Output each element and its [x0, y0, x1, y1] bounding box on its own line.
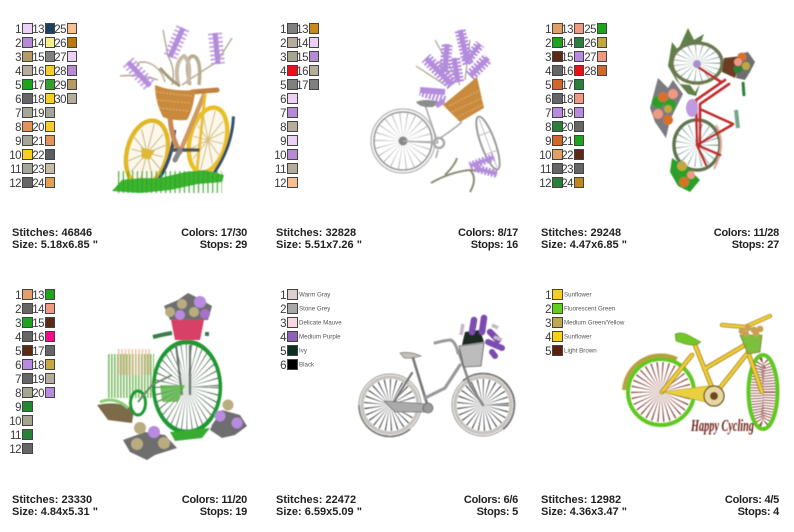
colour legend 2: 5: [280, 80, 286, 92]
lavender stems: [120, 30, 232, 86]
colour legend 1: 29: [54, 80, 66, 92]
colour legend 4: 20: [32, 388, 44, 400]
stitch and size stats 4: Colors: 11/20: [182, 494, 247, 506]
stitch and size stats 1: Colors: 17/30: [181, 227, 247, 239]
frame: [403, 105, 462, 158]
colour legend 4: 19: [32, 374, 44, 386]
bottom flower cluster: [670, 158, 700, 192]
illustration: yellow bicycle with lavender basket on grass: [112, 28, 236, 193]
colour legend 5: Delicate Mauve: [299, 320, 342, 326]
chain guard: [662, 386, 710, 403]
colour legend 1: 8: [15, 122, 21, 134]
stitch and size stats 6: Stops: 4: [738, 506, 780, 518]
panel: design 4 penny farthing with flowers: [9, 290, 247, 518]
colour legend 1: 14: [32, 38, 45, 50]
rear wheel: [371, 109, 435, 173]
rear wheel: [359, 374, 421, 436]
colour legend 3: 13: [561, 24, 573, 36]
colour legend 3: 6: [545, 94, 551, 106]
colour legend 1: 20: [32, 122, 44, 134]
bottom wheel: [674, 120, 721, 170]
colour legend 4: 16: [32, 332, 44, 344]
colour legend 6: 1: [545, 290, 551, 302]
top wheel: [672, 43, 722, 83]
colour legend 5: Ivy: [299, 348, 308, 354]
colour legend 3: 10: [539, 150, 551, 162]
colour legend 4: 11: [10, 430, 21, 442]
lavender flowers: [128, 28, 218, 86]
colour legend 6: 4: [545, 332, 552, 344]
basket: [459, 343, 484, 367]
colour legend 3: 25: [584, 24, 596, 36]
stitch and size stats 3: Stitches: 29248: [541, 227, 621, 239]
colour legend 4: 1: [15, 290, 21, 302]
illustration: grey bicycle with basket of purple flowers: [359, 318, 514, 436]
bottom sprig: [431, 158, 495, 192]
colour legend 2: [274, 24, 318, 190]
colour legend 3: 20: [561, 122, 573, 134]
stitch and size stats 5: Stops: 5: [477, 506, 518, 518]
colour legend 2: 10: [274, 150, 286, 162]
colour legend 1: 3: [15, 52, 21, 64]
frame: [170, 90, 217, 178]
colour legend 6: 5: [545, 346, 551, 358]
colour legend 3: 15: [561, 52, 573, 64]
stitch and size stats 5: Stitches: 22472: [276, 494, 356, 506]
grass: [112, 170, 224, 193]
frame: [662, 316, 770, 395]
colour legend 3: 19: [561, 108, 573, 120]
bottom-right flowers: [210, 400, 247, 438]
stitch and size stats 2: Stitches: 32828: [276, 227, 356, 239]
colour legend 4: 6: [15, 360, 21, 372]
colour legend 2: 6: [280, 94, 286, 106]
colour legend 2: 4: [280, 66, 287, 78]
colour legend 2: 1: [280, 24, 286, 36]
colour legend 4: 14: [32, 304, 45, 316]
stitch and size stats 1: Size: 5.18x6.85 ": [12, 239, 98, 251]
colour legend 1: 22: [32, 150, 44, 162]
stitch and size stats 5: Colors: 6/6: [464, 494, 518, 506]
colour legend 5: Black: [299, 362, 315, 368]
stitch and size stats 2: Size: 5.51x7.26 ": [276, 239, 362, 251]
colour legend 3: 4: [545, 66, 552, 78]
colour legend 1: 11: [10, 164, 21, 176]
colour legend 3: 17: [561, 80, 573, 92]
saddle: [416, 100, 440, 107]
colour legend 3: 26: [584, 38, 596, 50]
illustration: grey line bicycle with lavender basket: [371, 30, 504, 192]
illustration: red bicycle viewed from the side with flower clusters: [650, 28, 755, 192]
colour legend 2: 13: [296, 24, 308, 36]
colour legend 3: 11: [540, 164, 551, 176]
colour legend 2: 15: [296, 52, 308, 64]
wheels: [120, 116, 177, 191]
colour legend 1: 12: [9, 178, 21, 190]
colour legend 4: 15: [32, 318, 44, 330]
purple flowers: [461, 318, 502, 356]
stitch and size stats 2: Colors: 8/17: [458, 227, 518, 239]
colour legend 2: 2: [280, 38, 286, 50]
colour legend 1: 28: [54, 66, 66, 78]
stitch and size stats 6: [541, 494, 780, 518]
colour legend 6: Sunflower: [564, 292, 592, 298]
colour legend 2: 11: [275, 164, 286, 176]
colour legend 1: 5: [15, 80, 21, 92]
colour legend 5: Medium Purple: [299, 334, 341, 340]
stitch and size stats 3: Colors: 11/28: [714, 227, 779, 239]
colour legend 1: 2: [15, 38, 21, 50]
panel: design 5 grey bicycle with purple flowers: [276, 290, 518, 518]
basket: [443, 77, 484, 122]
colour legend 4: 13: [32, 290, 44, 302]
colour legend 4: 10: [9, 416, 21, 428]
colour legend 1: 21: [32, 136, 44, 148]
colour legend 6: 3: [545, 318, 551, 330]
stitch and size stats 6: Colors: 4/5: [725, 494, 779, 506]
lavender: [420, 30, 488, 106]
colour legend 2: 7: [280, 108, 286, 120]
stitch and size stats 4: Stops: 19: [200, 506, 247, 518]
big wheel: [154, 342, 220, 432]
frame: [392, 340, 483, 407]
chain guard: [384, 401, 428, 412]
stitch and size stats 1: [12, 227, 247, 251]
basket: [155, 85, 195, 120]
front wheel: [748, 355, 778, 429]
colour legend 2: 8: [280, 122, 286, 134]
colour legend 5: 2: [280, 304, 286, 316]
panel: design 3 red bicycle with flowers: [539, 24, 779, 251]
colour legend 3: 27: [584, 52, 596, 64]
colour legend 5: 1: [280, 290, 286, 302]
colour legend 2: 12: [274, 178, 286, 190]
colour legend 5: [280, 290, 342, 372]
illustration: green penny farthing with flowers and grasses: [97, 293, 247, 460]
colour legend 1: 1: [15, 24, 21, 36]
colour legend 3: 3: [545, 52, 551, 64]
basket and flowers: [722, 52, 755, 96]
colour legend 4: 17: [32, 346, 44, 358]
colour legend 3: 8: [545, 122, 551, 134]
grasses: [108, 354, 154, 398]
colour legend 4: [9, 290, 54, 456]
colour legend 5: Warm Gray: [299, 292, 331, 298]
pedal: [736, 110, 738, 128]
colour legend 6: Light Brown: [564, 348, 597, 354]
colour legend 4: 7: [15, 374, 21, 386]
colour legend 4: 18: [32, 360, 44, 372]
stitch and size stats 4: [12, 494, 247, 518]
colour legend 3: 2: [545, 38, 551, 50]
colour legend 3: 7: [545, 108, 551, 120]
colour legend 6: Sunflower: [564, 334, 592, 340]
colour legend 1: 15: [32, 52, 44, 64]
colour legend 1: 30: [54, 94, 66, 106]
colour legend 3: 5: [545, 80, 551, 92]
stitch and size stats 1: Stops: 29: [200, 239, 247, 251]
colour legend 6: [545, 290, 625, 358]
basket: [740, 335, 762, 354]
colour legend 1: 24: [32, 178, 45, 190]
foliage behind top wheel: [668, 28, 704, 96]
small wheel: [130, 391, 146, 415]
colour legend 3: 22: [561, 150, 573, 162]
colour legend 5: 4: [280, 332, 287, 344]
panel: design 2 grey bicycle with lavender: [274, 24, 518, 251]
colour legend 3: 21: [561, 136, 573, 148]
stems: [416, 40, 470, 85]
colour legend 1: 13: [32, 24, 44, 36]
colour legend 1: 25: [54, 24, 66, 36]
colour legend 3: 12: [539, 178, 551, 190]
rear wheel: [624, 355, 694, 425]
colour legend 1: 4: [15, 66, 22, 78]
colour legend 4: 5: [15, 346, 21, 358]
colour legend 3: [539, 24, 606, 190]
colour legend 4: 9: [15, 402, 21, 414]
colour legend 4: 2: [15, 304, 21, 316]
colour legend 3: 1: [545, 24, 551, 36]
basket flowers: [739, 325, 763, 337]
left flower cluster: [650, 78, 683, 138]
saddle: [400, 352, 421, 358]
illustration: yellow and green bicycle: [624, 316, 778, 435]
colour legend 1: [9, 24, 76, 190]
colour legend 5: 6: [280, 360, 286, 372]
colour legend 6: Medium Green/Yellow: [564, 320, 625, 326]
stitch and size stats 4: Stitches: 23330: [12, 494, 92, 506]
stitch and size stats 3: Size: 4.47x6.85 ": [541, 239, 627, 251]
colour legend 6: 2: [545, 304, 551, 316]
colour legend 1: 26: [54, 38, 66, 50]
red frame: [696, 67, 733, 165]
stitch and size stats 1: Stitches: 46846: [12, 227, 92, 239]
colour legend 5: Stone Grey: [299, 306, 331, 312]
colour legend 1: 23: [32, 164, 44, 176]
slogan: Happy Cycling: [690, 416, 754, 435]
colour legend 4: 4: [15, 332, 22, 344]
stitch and size stats 6: Size: 4.36x3.47 ": [541, 506, 627, 518]
purple saddle: [686, 99, 698, 117]
colour legend 5: 3: [280, 318, 286, 330]
colour legend 3: 18: [561, 94, 573, 106]
colour legend 2: 3: [280, 52, 286, 64]
handlebar: [153, 333, 209, 337]
colour legend 6: Fluorescent Green: [564, 306, 616, 312]
stitch and size stats 2: [276, 227, 518, 251]
colour legend 4: 12: [9, 444, 21, 456]
colour legend 2: 9: [280, 136, 286, 148]
colour legend 4: 8: [15, 388, 21, 400]
colour legend 3: 23: [561, 164, 573, 176]
panel: design 6 yellow green bicycle Happy Cycling: [541, 290, 780, 518]
colour legend 3: 16: [561, 66, 573, 78]
red basket: [171, 320, 204, 340]
panel: design 1 lavender basket bicycle: [9, 24, 247, 251]
colour legend 1: 10: [9, 150, 21, 162]
stitch and size stats 3: [541, 227, 779, 251]
colour legend 3: 28: [584, 66, 596, 78]
colour legend 1: 16: [32, 66, 44, 78]
colour legend 1: 18: [32, 94, 44, 106]
colour legend 1: 19: [32, 108, 44, 120]
saddle: [675, 333, 701, 345]
colour legend 2: 14: [296, 38, 309, 50]
top flowers: [164, 293, 212, 320]
colour legend 1: 7: [15, 108, 21, 120]
colour legend 3: 24: [561, 178, 574, 190]
bottom-left flowers: [123, 422, 177, 460]
colour legend 1: 17: [32, 80, 44, 92]
colour legend 2: 16: [296, 66, 308, 78]
grass under wheel: [170, 428, 210, 441]
colour legend 3: 9: [545, 136, 551, 148]
colour legend 5: 5: [280, 346, 286, 358]
stitch and size stats 4: Size: 4.84x5.31 ": [12, 506, 98, 518]
colour legend 1: 9: [15, 136, 21, 148]
front wheel: [472, 114, 504, 172]
front wheel: [452, 374, 514, 436]
stitch and size stats 2: Stops: 16: [471, 239, 518, 251]
stitch and size stats 5: [276, 494, 518, 518]
colour legend 2: 17: [296, 80, 308, 92]
colour legend 1: 27: [54, 52, 66, 64]
colour legend 1: 6: [15, 94, 21, 106]
stitch and size stats 3: Stops: 27: [732, 239, 779, 251]
colour legend 3: 14: [561, 38, 574, 50]
colour legend 4: 3: [15, 318, 21, 330]
stitch and size stats 5: Size: 6.59x5.09 ": [276, 506, 362, 518]
stitch and size stats 6: Stitches: 12982: [541, 494, 621, 506]
